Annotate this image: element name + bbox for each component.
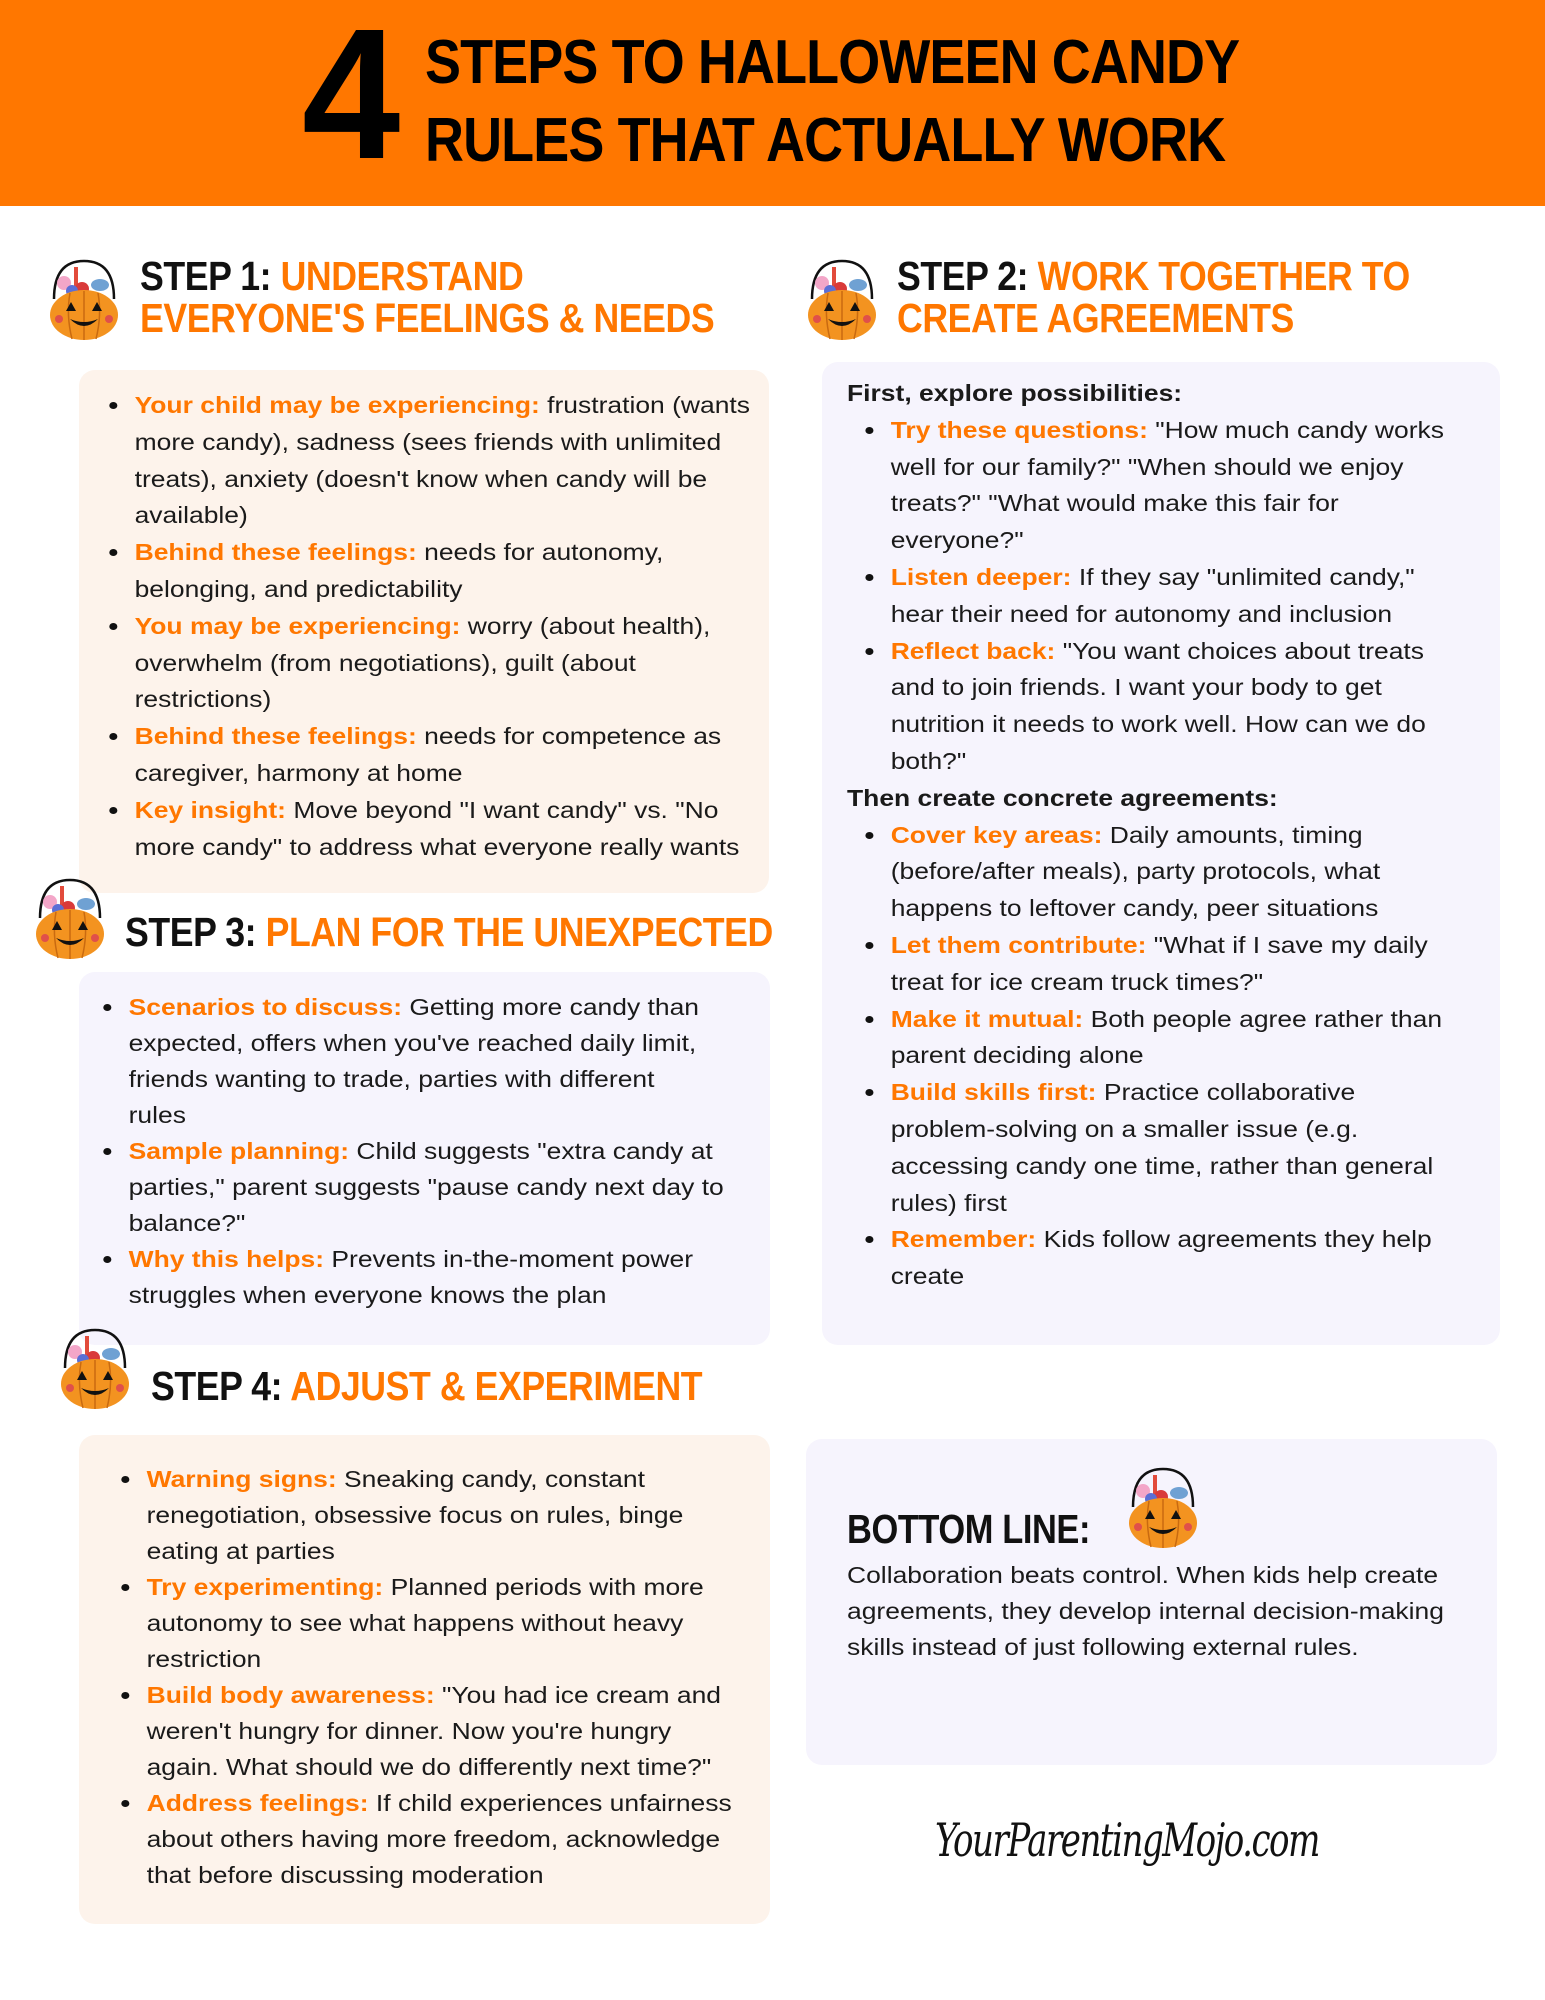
step 3 list: balance?" xyxy=(129,1210,245,1236)
step 2 content: Make it mutual: Both people agree rather than xyxy=(891,1006,1442,1032)
step 1 list: belonging, and predictability xyxy=(135,576,463,602)
step 2 content: accessing candy one time, rather than general xyxy=(891,1153,1433,1179)
panel: step 3 xyxy=(79,972,770,1345)
step 2 content: everyone?" xyxy=(891,527,1024,553)
step 1 list: more candy" to address what everyone really wants xyxy=(135,834,739,860)
step 2 content: Build skills first: Practice collaborative xyxy=(891,1079,1355,1105)
step 1 list: available) xyxy=(135,502,248,528)
step 3 list: rules xyxy=(129,1102,186,1128)
step 2 content: Reflect back: "You want choices about treats xyxy=(891,638,1424,664)
heading text: STEP 2: WORK TOGETHER TO xyxy=(897,253,1410,299)
step 4 list: about others having more freedom, acknowledge xyxy=(147,1826,720,1852)
step 4 list xyxy=(121,1466,732,1888)
step 3 list: Scenarios to discuss: Getting more candy than xyxy=(129,994,699,1020)
step 2 content: Cover key areas: Daily amounts, timing xyxy=(891,822,1363,848)
step 2 content: problem-solving on a smaller issue (e.g. xyxy=(891,1116,1358,1142)
step 1 list xyxy=(109,392,750,860)
step 1 heading xyxy=(50,253,714,341)
step 2 content: First, explore possibilities: xyxy=(847,380,1182,406)
step 2 content: hear their need for autonomy and inclusion xyxy=(891,601,1392,627)
heading text: STEP 1: UNDERSTAND xyxy=(140,253,523,299)
step 2 content: well for our family?" "When should we enjoy xyxy=(891,454,1403,480)
title xyxy=(425,28,1240,175)
step 1 list: You may be experiencing: worry (about health), xyxy=(135,613,710,639)
step 2 content: treats?" "What would make this fair for xyxy=(891,490,1339,516)
heading text: CREATE AGREEMENTS xyxy=(897,295,1294,341)
icon: pumpkin xyxy=(50,260,118,340)
step 2 content: both?" xyxy=(891,748,966,774)
step 2 content: Remember: Kids follow agreements they help xyxy=(891,1226,1432,1252)
step 2 content: Let them contribute: "What if I save my daily xyxy=(891,932,1428,958)
panel: step 2 xyxy=(822,362,1500,1345)
step 4 list: Try experimenting: Planned periods with more xyxy=(147,1574,704,1600)
step 3 list: Sample planning: Child suggests "extra candy at xyxy=(129,1138,713,1164)
step 4 heading xyxy=(61,1328,702,1409)
step 4 list: renegotiation, obsessive focus on rules, binge xyxy=(147,1502,683,1528)
step 2 content: rules) first xyxy=(891,1190,1007,1216)
step 3 list: parties," parent suggests "pause candy next day to xyxy=(129,1174,724,1200)
panel: step 1 xyxy=(79,370,769,893)
step 4 list: restriction xyxy=(147,1646,261,1672)
step 3 list: friends wanting to trade, parties with different xyxy=(129,1066,654,1092)
step 2 content: and to join friends. I want your body to get xyxy=(891,674,1382,700)
icon: pumpkin xyxy=(61,1328,129,1409)
heading text xyxy=(140,253,714,341)
bottom line text: agreements, they develop internal decision-making xyxy=(847,1598,1444,1624)
step 4 list: Warning signs: Sneaking candy, constant xyxy=(147,1466,645,1492)
step 2 content: create xyxy=(891,1263,964,1289)
step 4 list: that before discussing moderation xyxy=(147,1862,544,1888)
bottom line text xyxy=(847,1562,1444,1660)
step 4 list: autonomy to see what happens without heavy xyxy=(147,1610,683,1636)
step 1 list: more candy), sadness (sees friends with unlimited xyxy=(135,429,721,455)
heading text: EVERYONE'S FEELINGS & NEEDS xyxy=(140,295,714,341)
panel: step 4 xyxy=(79,1435,770,1924)
step 3 list: struggles when everyone knows the plan xyxy=(129,1282,606,1308)
step 1 list: restrictions) xyxy=(135,686,271,712)
step 1 list: caregiver, harmony at home xyxy=(135,760,462,786)
step 2 content: Try these questions: "How much candy works xyxy=(891,417,1444,443)
step 3 list: Why this helps: Prevents in-the-moment power xyxy=(129,1246,693,1272)
step 2 content: (before/after meals), party protocols, what xyxy=(891,858,1380,884)
bottom line heading: BOTTOM LINE: xyxy=(847,1506,1090,1552)
header banner xyxy=(0,0,1545,206)
step 4 list: weren't hungry for dinner. Now you're hungry xyxy=(147,1718,671,1744)
title: RULES THAT ACTUALLY WORK xyxy=(425,106,1225,175)
bottom line text: skills instead of just following external rules. xyxy=(847,1634,1359,1660)
step 1 list: Behind these feelings: needs for autonomy, xyxy=(135,539,663,565)
step 4 list: Build body awareness: "You had ice cream and xyxy=(147,1682,721,1708)
signature: YourParentingMojo.com xyxy=(935,1813,1319,1867)
step 2 heading xyxy=(808,253,1410,341)
step 1 list: treats), anxiety (doesn't know when candy will be xyxy=(135,466,707,492)
step 4 list: again. What should we do differently next time?" xyxy=(147,1754,711,1780)
step 2 content: nutrition it needs to work well. How can we do xyxy=(891,711,1426,737)
icon: pumpkin xyxy=(808,260,876,340)
step 3 heading xyxy=(36,878,773,959)
step 2 content: parent deciding alone xyxy=(891,1042,1144,1068)
heading text xyxy=(897,253,1410,341)
step 2 content: happens to leftover candy, peer situations xyxy=(891,895,1378,921)
panel: bottom line xyxy=(806,1439,1497,1765)
step 1 list: overwhelm (from negotiations), guilt (about xyxy=(135,650,636,676)
heading text: STEP 3: PLAN FOR THE UNEXPECTED xyxy=(125,909,773,955)
step 2 content xyxy=(847,380,1444,1289)
heading text: STEP 4: ADJUST & EXPERIMENT xyxy=(151,1363,702,1409)
icon: pumpkin xyxy=(1129,1468,1197,1548)
step 2 content: treat for ice cream truck times?" xyxy=(891,969,1263,995)
step 4 list: eating at parties xyxy=(147,1538,335,1564)
step 3 list xyxy=(103,994,724,1308)
step 4 list: Address feelings: If child experiences unfairness xyxy=(147,1790,732,1816)
step 2 content: Then create concrete agreements: xyxy=(847,785,1278,811)
step 1 list: Behind these feelings: needs for competence as xyxy=(135,723,721,749)
title: STEPS TO HALLOWEEN CANDY xyxy=(425,28,1239,97)
step 1 list: Key insight: Move beyond "I want candy" vs. "No xyxy=(135,797,718,823)
step 1 list: Your child may be experiencing: frustration (wants xyxy=(135,392,750,418)
bottom line text: Collaboration beats control. When kids help create xyxy=(847,1562,1438,1588)
step 3 list: expected, offers when you've reached daily limit, xyxy=(129,1030,696,1056)
icon: pumpkin xyxy=(36,878,104,959)
step 2 content: Listen deeper: If they say "unlimited candy," xyxy=(891,564,1415,590)
